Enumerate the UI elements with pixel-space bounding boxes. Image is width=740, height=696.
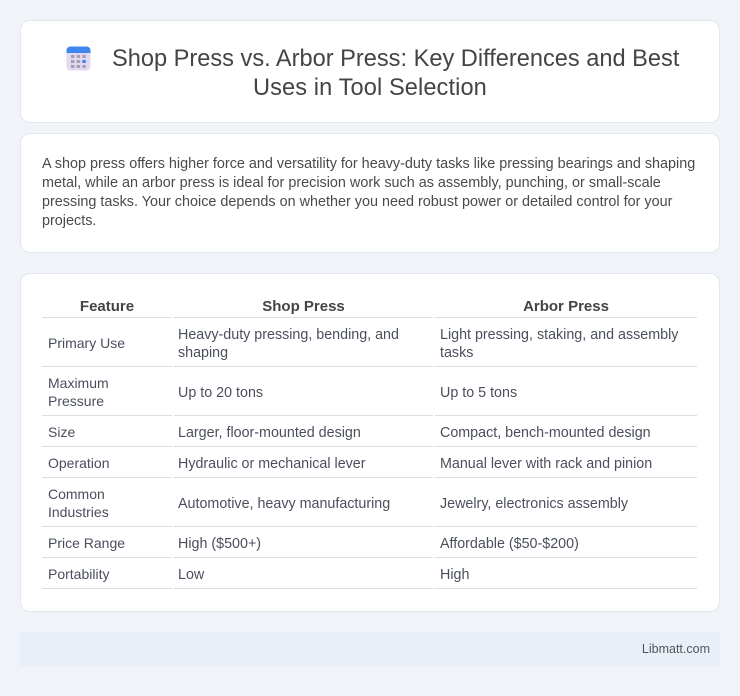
row: primary use: shaping (178, 345, 228, 361)
comparison table panel (20, 273, 720, 612)
row: primary use: Heavy-duty pressing, bending, and (178, 327, 399, 343)
row: portability: Low (178, 567, 204, 583)
table header row: Shop Press (262, 298, 345, 315)
row: maximum pressure: Up to 20 tons (178, 385, 263, 401)
intro text: metal, while an arbor press is ideal for precision work such as assembly, punching, or small-scale (42, 175, 661, 191)
footer bar (20, 632, 720, 666)
row: maximum pressure: Maximum (48, 375, 109, 391)
row: size: Larger, floor-mounted design (178, 425, 361, 441)
row: size: Size (48, 424, 75, 440)
row: primary use: Light pressing, staking, and assembly (440, 327, 678, 343)
row: operation (48, 455, 652, 472)
intro text (42, 156, 695, 229)
title: Uses in Tool Selection (253, 75, 487, 101)
row: portability: High (440, 567, 469, 583)
row: primary use: Primary Use (48, 335, 125, 351)
intro text: pressing tasks. Your choice depends on whether you need robust power or detailed control for your (42, 194, 672, 210)
intro panel (20, 133, 720, 253)
row: primary use (48, 327, 678, 361)
row: common industries (48, 486, 628, 520)
table header row: Arbor Press (523, 298, 609, 315)
row: operation: Operation (48, 455, 109, 471)
icon: calendar (66, 46, 90, 70)
title: Shop Press vs. Arbor Press: Key Differences and Best (112, 46, 679, 72)
row: maximum pressure: Up to 5 tons (440, 385, 517, 401)
row: operation: Manual lever with rack and pinion (440, 456, 652, 472)
table header row (80, 298, 609, 315)
row: price range: Price Range (48, 535, 125, 551)
row: common industries: Automotive, heavy manufacturing (178, 496, 390, 512)
row: price range: Affordable ($50-$200) (440, 536, 579, 552)
row: size: Compact, bench-mounted design (440, 425, 651, 441)
intro text: A shop press offers higher force and versatility for heavy-duty tasks like pressing bearings and shaping (42, 156, 695, 172)
row: size (48, 424, 651, 441)
footer credit: Libmatt.com (642, 642, 710, 656)
table header row: Feature (80, 298, 134, 315)
row: portability (48, 566, 469, 583)
row: maximum pressure: Pressure (48, 393, 104, 409)
row: common industries: Common (48, 486, 105, 502)
row: common industries: Jewelry, electronics assembly (440, 496, 628, 512)
row: common industries: Industries (48, 504, 109, 520)
row: primary use: tasks (440, 345, 473, 361)
row: price range (48, 535, 579, 552)
row: price range: High ($500+) (178, 536, 261, 552)
title (112, 46, 680, 101)
header panel (20, 20, 720, 123)
intro text: projects. (42, 213, 96, 229)
row: maximum pressure (48, 375, 517, 409)
row: portability: Portability (48, 566, 109, 582)
row: operation: Hydraulic or mechanical lever (178, 456, 366, 472)
